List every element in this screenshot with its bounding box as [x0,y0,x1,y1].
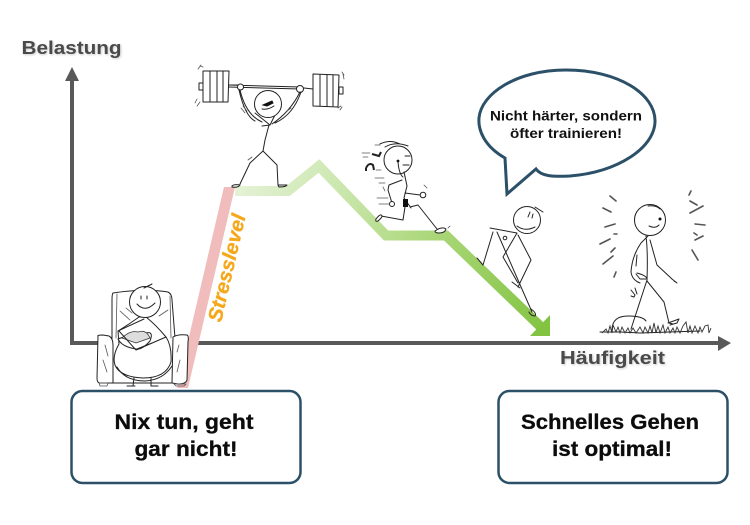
callout text: brisk walking: Schnelles Gehen [521,411,699,434]
y-axis arrow [65,67,79,345]
y-axis label: Belastung [22,39,122,59]
x-axis arrow [71,336,731,351]
figure: walking down the slope [477,206,543,316]
speech bubble text: Nicht härter, sondern [490,108,642,124]
x-axis label: Häufigkeit [561,349,666,369]
speech bubble text: öfter trainieren! [510,125,622,141]
y-axis label: Belastung [22,38,122,58]
stress level green falling line [235,166,550,336]
callout text: brisk walking [521,411,699,461]
stress level red rising bar [177,187,235,388]
figure: walking person with glow [600,191,711,333]
figure: runner with headphones [362,142,450,233]
callout text: nothing: Nix tun, geht [114,411,254,434]
callout: nothing [72,391,300,483]
x-axis label: Häufigkeit [560,348,665,368]
callout text: nothing: gar nicht! [134,438,238,461]
speech bubble text [490,108,642,141]
figure: weightlifter [195,65,344,187]
callout: brisk walking [498,391,728,483]
stress level label: Stresslevel [204,212,251,324]
speech bubble [479,70,655,194]
figure: sitting on armchair [97,284,188,386]
callout text: brisk walking: ist optimal! [552,438,672,461]
callout text: nothing [114,411,254,461]
